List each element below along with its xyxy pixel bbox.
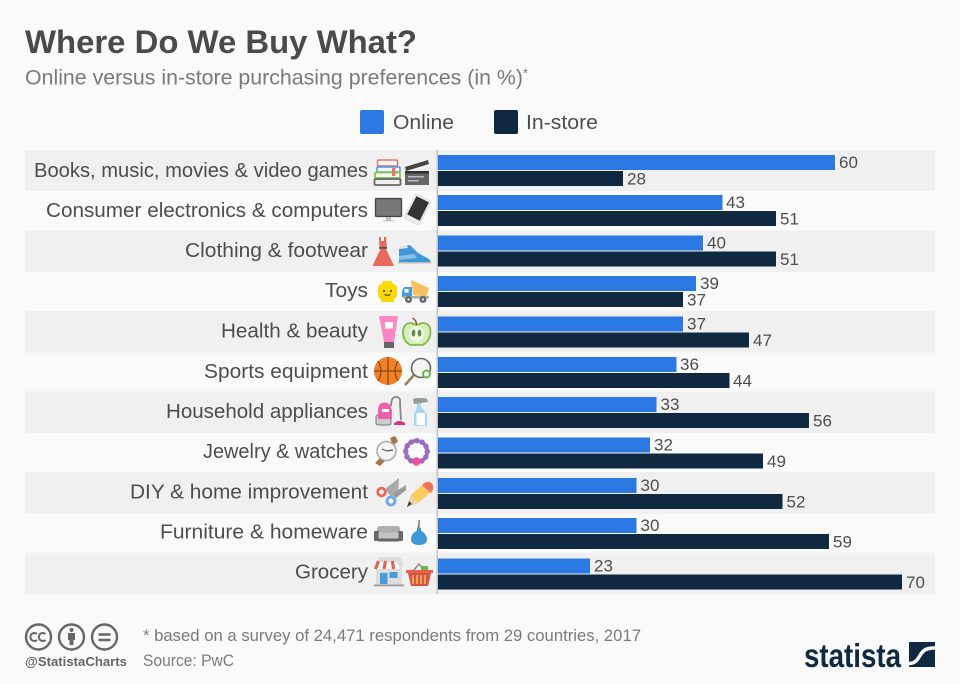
subtitle: Online versus in-store purchasing preferences (in %) [25,66,527,90]
title: Where Do We Buy What? [25,23,417,60]
values: 56 [813,412,832,430]
icon: wristwatch [375,436,398,466]
in-store bar: 51 [438,252,776,266]
online bar: 37 [438,316,683,332]
values [627,153,858,188]
values [654,436,786,471]
row: electronics [46,193,799,228]
icon: basket [406,564,433,586]
icon: lego head [378,281,397,302]
values: 44 [733,372,752,390]
in-store bar: 28 [438,171,623,186]
icon: sneaker [398,245,431,264]
row: furniture [160,516,852,552]
online bar: 32 [438,438,650,452]
icon: clapperboard [405,160,429,185]
icon: vase [411,520,427,545]
values: 51 [780,250,799,269]
row: diy: DIY & home improvement [130,480,368,504]
legend [360,110,598,134]
icon: basketball [374,357,402,385]
online bar: 39 [438,276,696,291]
online bar: 36 [438,357,676,372]
values: 43 [726,193,745,212]
row: household [25,392,935,433]
legend: in-store [494,110,598,134]
icon: creative commons licence [26,624,117,650]
values: 32 [654,436,673,454]
row: health [25,311,935,352]
values [660,395,832,430]
logo mark [909,642,935,667]
social handle: @StatistaCharts [25,655,127,669]
icon: shop [374,557,404,586]
in-store bar: 70 [438,574,902,590]
icon: apple [403,318,430,345]
icon: vacuum [376,397,405,425]
row: furniture: Furniture & homeware [160,520,368,544]
footnote: * based on a survey of 24,471 respondents from 29 countries, 2017 [143,626,641,645]
icon: tablet [404,194,431,225]
in-store bar: 49 [438,454,763,468]
legend: online [360,110,454,134]
values [726,193,799,228]
values [640,516,852,552]
in-store bar: 51 [438,211,776,226]
values: 28 [627,170,646,188]
in-store bar: 37 [438,292,683,307]
values [687,314,772,350]
legend: online: Online [393,111,454,134]
values: 52 [786,492,805,512]
values [680,355,752,390]
values: 30 [640,516,659,535]
online bar: 43 [438,195,722,210]
values [594,556,925,592]
row: jewelry: Jewelry & watches [203,440,368,463]
legend: in-store: In-store [526,111,598,134]
icon: cream tube [379,316,398,348]
icon: scissors [378,478,406,505]
statista logo: statista [804,637,902,674]
icon: spray bottle [413,398,428,426]
row: toys [325,274,719,310]
row: grocery: Grocery [295,560,369,584]
source: Source: PwC [143,651,234,670]
values: 40 [707,234,726,252]
row: household: Household appliances [166,400,368,423]
values: 37 [687,290,706,310]
icon: dress [372,237,394,266]
online bar: 33 [438,397,656,412]
subtitle: * [523,66,528,80]
values: 70 [906,573,925,592]
values: 49 [767,452,786,471]
row: toys: Toys [325,279,368,302]
icon: bead bracelet [406,441,427,466]
row: clothing [25,230,935,272]
values: 23 [594,556,613,576]
online bar: 60 [438,155,835,170]
values [687,274,719,310]
icon: racket [405,358,430,385]
row: books: Books, music, movies & video games [34,159,368,182]
row: clothing: Clothing & footwear [185,239,368,262]
row: diy [25,472,935,514]
row: sports [204,355,752,390]
in-store bar: 47 [438,332,749,348]
row: sports: Sports equipment [204,360,368,383]
online bar: 30 [438,518,636,533]
online bar: 30 [438,478,636,493]
icon: monitor [376,198,402,222]
row: electronics: Consumer electronics & computers [46,199,368,222]
in-store bar: 44 [438,373,730,388]
row: health: Health & beauty [221,320,369,342]
row: grocery [25,552,935,594]
values: 36 [680,355,699,374]
icon: pencil [407,482,433,507]
in-store bar: 59 [438,534,829,549]
values: 59 [833,532,852,552]
values: 37 [687,314,706,334]
icon: truck [402,280,429,303]
values: 47 [753,331,772,350]
values: 39 [700,274,719,293]
values: 33 [660,395,679,414]
in-store bar: 56 [438,413,809,428]
in-store bar: 52 [438,494,782,509]
icon: sofa [374,526,403,542]
values [640,476,805,512]
icon: books [374,160,400,185]
row: books [25,150,935,191]
values: 60 [839,153,858,172]
values [707,234,799,269]
row: jewelry [203,436,786,471]
online bar: 40 [438,236,703,250]
values: 51 [780,210,799,228]
values: 30 [640,476,659,495]
online bar: 23 [438,558,590,574]
